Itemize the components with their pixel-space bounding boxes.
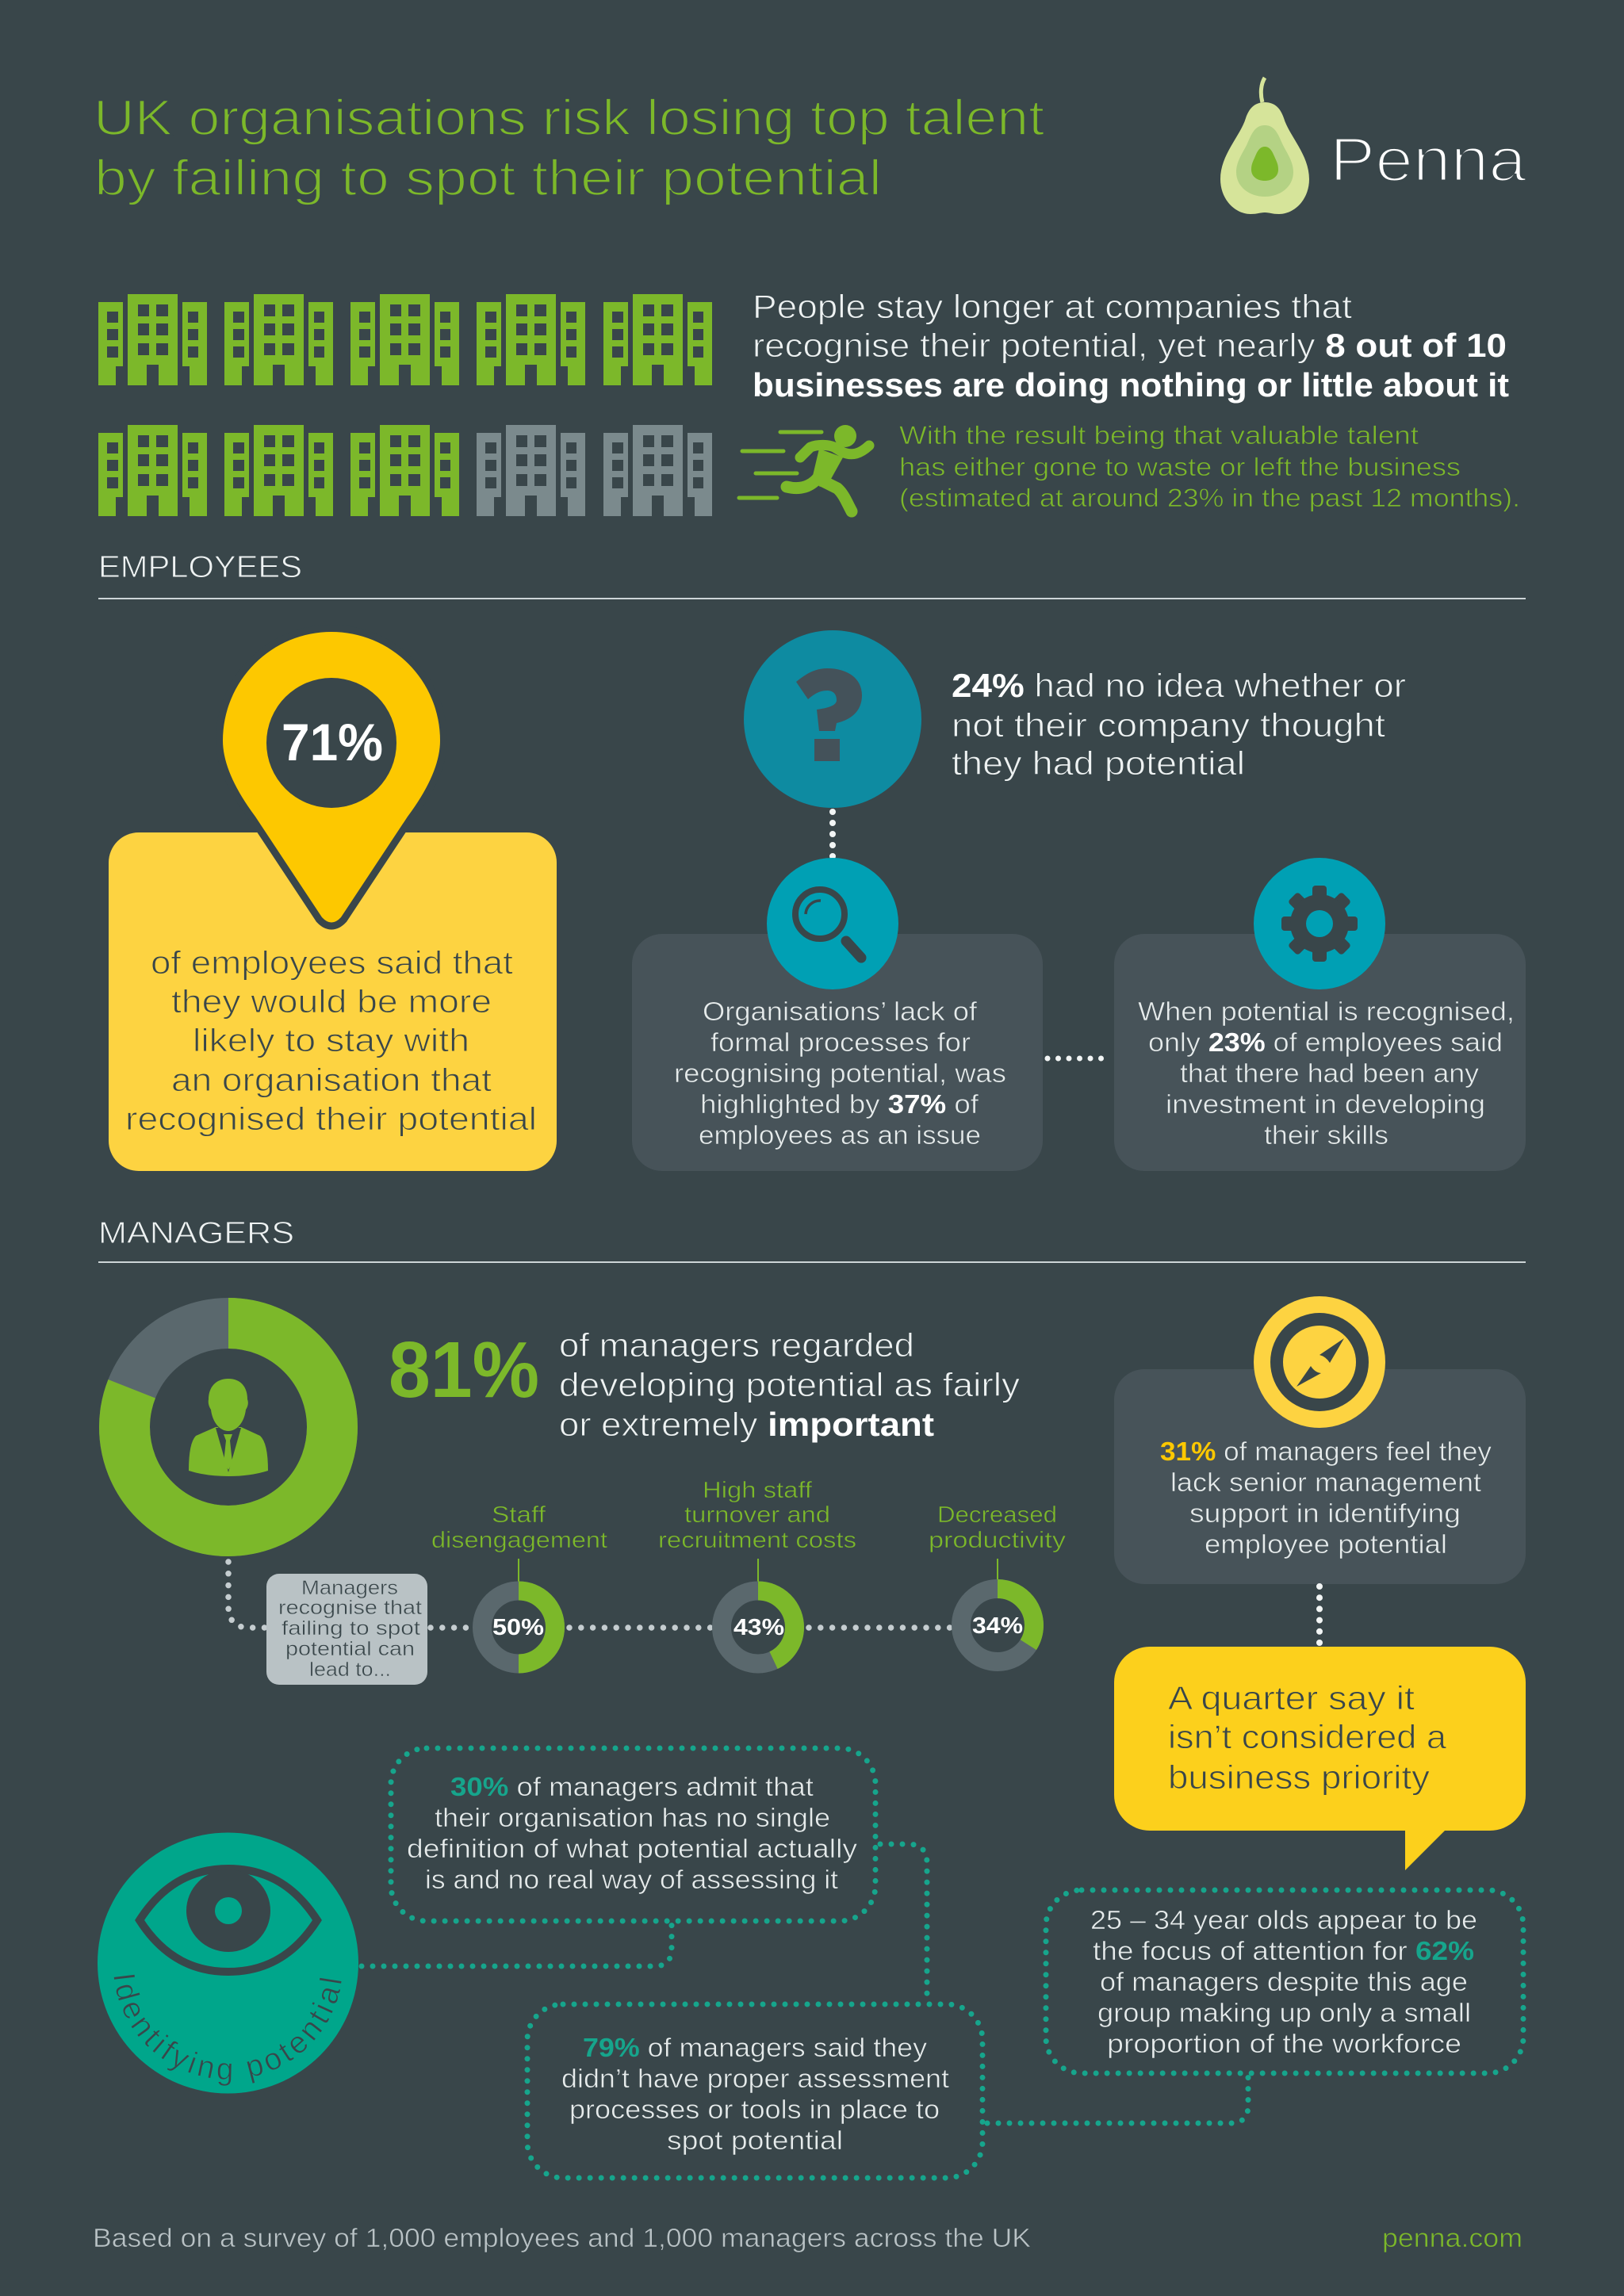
chart: staff disengagement 50% — [431, 1502, 607, 1663]
callout: 79% dotted box: spot potential — [667, 2126, 843, 2155]
text: 71% description — [125, 944, 537, 1137]
icon row: green buildings — [98, 294, 712, 385]
callout: 30% dotted box — [391, 1748, 875, 1921]
chart: staff turnover 43%: recruitment costs — [658, 1528, 856, 1553]
text: 71% description: of employees said that — [151, 944, 514, 981]
callout: 62% dotted box: 25 – 34 year olds appear to be — [1090, 1905, 1477, 1934]
intro text: recognise their potential, yet nearly 8 out of 10 — [753, 327, 1507, 364]
chart: staff disengagement 50%: 50% — [492, 1615, 544, 1640]
text: 31%: lack senior management — [1170, 1468, 1481, 1497]
callout: 62% dotted box — [1046, 1890, 1523, 2073]
stat: 81% — [389, 1326, 1020, 1443]
green result text: (estimated at around 23% in the past 12 months). — [899, 484, 1520, 512]
callout: a quarter speech bubble: isn’t considered a — [1168, 1718, 1447, 1755]
stat: 81%: 81% — [389, 1326, 539, 1414]
title: by failing to spot their potential — [94, 151, 882, 206]
callout: 30% dotted box: 30% of managers admit that — [450, 1772, 814, 1801]
text: formal processes: Organisations’ lack of — [703, 997, 978, 1026]
icon: identifying potential eye: Identifying potential — [114, 1974, 341, 2086]
text: 71% description: likely to stay with — [193, 1022, 469, 1058]
chart: staff turnover 43%: turnover and — [684, 1502, 830, 1528]
dotted connector: question to magnifier — [829, 812, 836, 858]
logo: Penna pear — [1220, 78, 1527, 214]
note: managers recognise: potential can — [285, 1638, 415, 1660]
text: 24%: not their company thought — [952, 706, 1385, 744]
text: skills investment: only 23% of employees said — [1148, 1027, 1503, 1057]
text: skills investment — [1138, 997, 1515, 1150]
text: 71% description: recognised their potential — [125, 1100, 537, 1137]
footer: source note: Based on a survey of 1,000 employees and 1,000 managers across the UK — [93, 2223, 1031, 2252]
chart: decreased productivity 34%: 34% — [972, 1613, 1023, 1639]
chart: staff turnover 43%: High staff — [703, 1478, 813, 1503]
chart: staff disengagement 50%: disengagement — [431, 1528, 607, 1553]
chart: staff turnover 43%: 43% — [733, 1615, 784, 1640]
heading: managers: MANAGERS — [98, 1216, 294, 1250]
green result text — [899, 421, 1520, 512]
text: formal processes — [674, 997, 1006, 1150]
text: 71% description: they would be more — [171, 983, 492, 1020]
icon: map pin with 71% — [223, 632, 440, 923]
callout: a quarter speech bubble: business priority — [1168, 1758, 1430, 1796]
icon: magnifier — [767, 858, 898, 989]
dotted connectors: identifying potential — [362, 1844, 1248, 2123]
icon: identifying potential eye — [98, 1833, 358, 2093]
callout: 79% dotted box: 79% of managers said they — [583, 2033, 928, 2062]
callout: 62% dotted box: proportion of the workforce — [1107, 2029, 1461, 2058]
intro text — [753, 288, 1509, 404]
icon: manager — [189, 1379, 268, 1476]
note: managers recognise: lead to... — [309, 1659, 391, 1681]
intro text: businesses are doing nothing or little about it — [753, 366, 1509, 404]
logo: Penna pear: Penna — [1330, 124, 1527, 194]
text: 31% — [1160, 1437, 1492, 1559]
text: formal processes: formal processes for — [710, 1027, 971, 1057]
icon: map pin with 71%: 71% — [282, 713, 383, 771]
text: 24%: 24% had no idea whether or — [952, 667, 1406, 704]
text: 81% description — [559, 1326, 1020, 1443]
text: 71% description: an organisation that — [171, 1062, 492, 1098]
footer: website: penna.com — [1382, 2223, 1522, 2252]
chart: 81% donut with manager icon — [124, 1323, 332, 1531]
title — [94, 90, 1045, 206]
callout: 30% dotted box: their organisation has no single — [435, 1803, 830, 1832]
text: formal processes: highlighted by 37% of — [700, 1089, 979, 1119]
text: 31%: 31% of managers feel they — [1160, 1437, 1492, 1466]
green result text: has either gone to waste or left the business — [899, 453, 1461, 481]
callout: a quarter speech bubble: A quarter say it — [1168, 1679, 1415, 1716]
panel: 71% yellow box — [109, 632, 557, 1171]
text: 81% description: developing potential as fairly — [559, 1366, 1020, 1403]
chart: decreased productivity 34%: Decreased — [937, 1502, 1057, 1528]
panel: formal processes — [632, 858, 1043, 1171]
dotted connector: panel to speech bubble — [1316, 1586, 1323, 1647]
callout: 79% dotted box: didn’t have proper assessment — [561, 2064, 949, 2093]
callout: 30% dotted box: is and no real way of assessing it — [425, 1865, 838, 1894]
text: formal processes: employees as an issue — [699, 1120, 981, 1150]
text: 31%: employee potential — [1205, 1529, 1447, 1559]
text: skills investment: that there had been any — [1180, 1058, 1480, 1088]
text: 81% description: of managers regarded — [559, 1326, 914, 1364]
text: 24%: they had potential — [952, 744, 1245, 782]
chart: staff turnover 43% — [658, 1478, 856, 1663]
panel: senior management support — [1114, 1296, 1526, 1584]
heading: employees: EMPLOYEES — [98, 550, 302, 584]
chart: staff disengagement 50%: Staff — [492, 1502, 546, 1528]
note: managers recognise: Managers — [301, 1577, 398, 1599]
callout: 79% dotted box: processes or tools in place to — [569, 2095, 940, 2124]
callout: 79% dotted box — [527, 2004, 982, 2178]
icon: question mark circle — [744, 630, 921, 808]
dotted connector: between panels — [1048, 1056, 1112, 1061]
title: UK organisations risk losing top talent — [94, 90, 1045, 146]
callout: 30% dotted box: definition of what potential actually — [407, 1834, 858, 1863]
text: skills investment: investment in developing — [1166, 1089, 1485, 1119]
note: managers recognise: recognise that — [278, 1597, 422, 1619]
chart: decreased productivity 34%: productivity — [929, 1528, 1067, 1553]
text: 31%: support in identifying — [1189, 1498, 1461, 1528]
chart: decreased productivity 34% — [929, 1502, 1067, 1662]
icon: gear — [1254, 858, 1385, 989]
callout: 62% dotted box: the focus of attention for 62% — [1093, 1936, 1474, 1965]
text: 24% — [952, 667, 1406, 782]
note: managers recognise: failing to spot — [282, 1617, 420, 1640]
note: managers recognise — [266, 1574, 427, 1685]
text: 81% description: or extremely important — [559, 1406, 934, 1443]
callout: 62% dotted box: of managers despite this age — [1100, 1967, 1468, 1996]
callout: a quarter speech bubble — [1114, 1647, 1526, 1870]
text: formal processes: recognising potential, was — [674, 1058, 1006, 1088]
dotted connector: donut to note — [228, 1562, 952, 1628]
intro text: People stay longer at companies that — [753, 288, 1352, 325]
panel: skills investment — [1114, 858, 1526, 1171]
icon: compass — [1254, 1296, 1385, 1428]
text: skills investment: When potential is recognised, — [1138, 997, 1515, 1026]
green result text: With the result being that valuable talent — [899, 421, 1419, 450]
callout: 62% dotted box: group making up only a small — [1097, 1998, 1471, 2027]
icon: running figure — [739, 425, 869, 511]
icon row: 8 of 10 buildings — [98, 425, 712, 516]
text: skills investment: their skills — [1264, 1120, 1388, 1150]
